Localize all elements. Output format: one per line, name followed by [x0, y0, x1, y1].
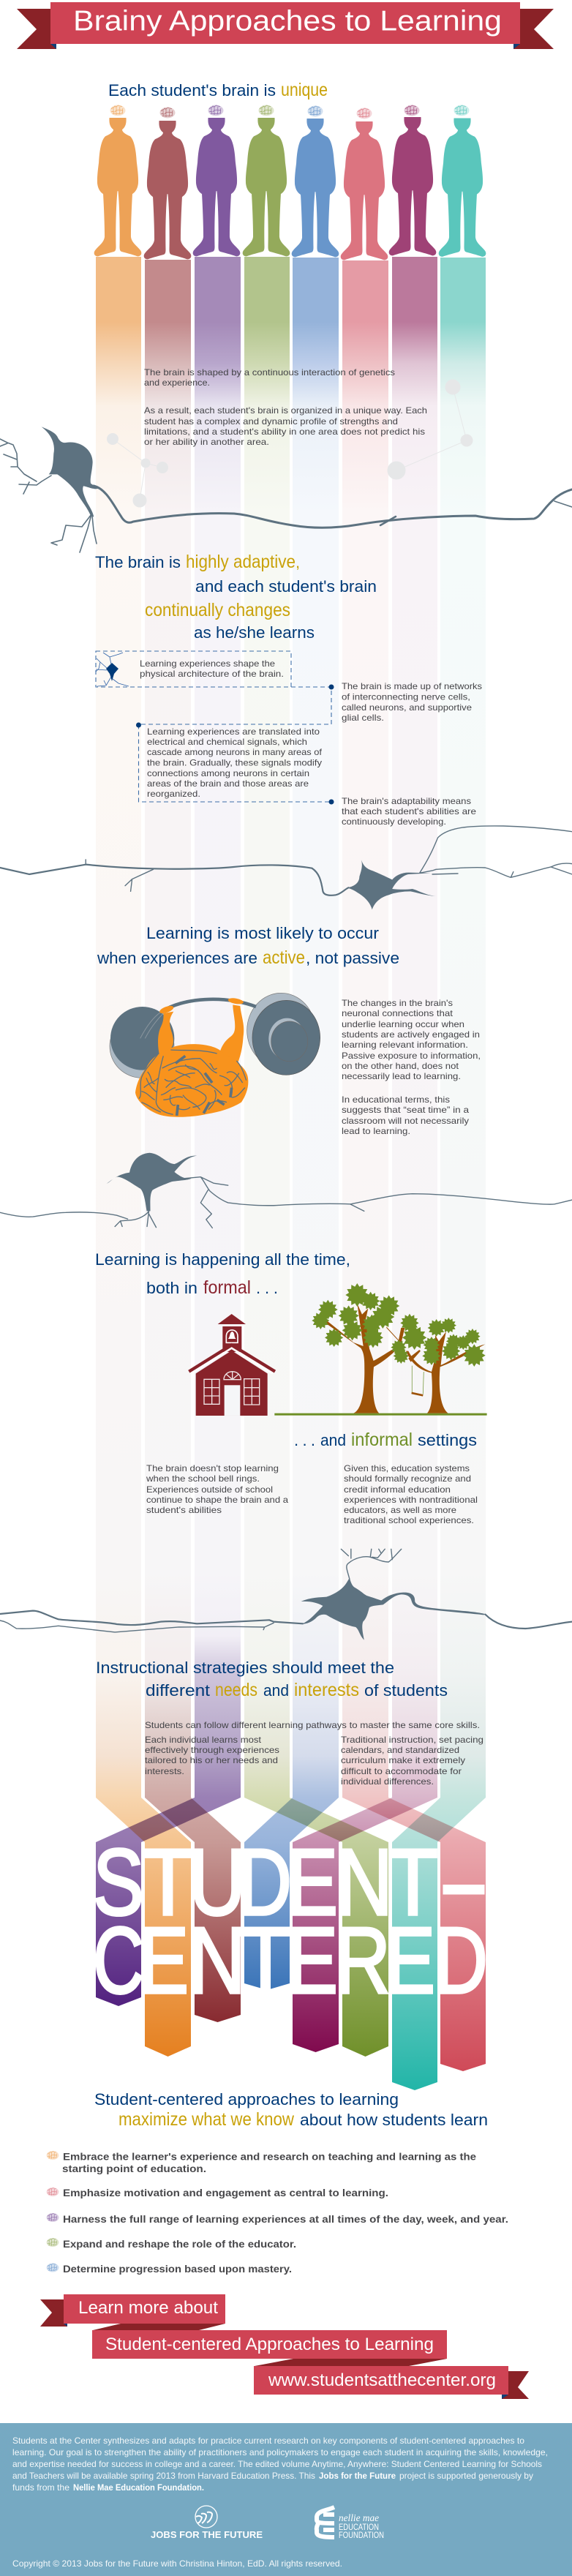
text: signals: reorganized.: [147, 789, 200, 799]
text: signals: [147, 726, 323, 799]
text: neuronal changes: students are actively engaged in: [342, 1029, 480, 1040]
heading: needs and interests: and: [263, 1681, 289, 1700]
footer text: learning. Our goal is to strengthen the ability of practitioners and policymakers to engage each student in acquiring the skills, knowledge,: [12, 2447, 548, 2457]
heading: highly adaptive: as he/she learns: [194, 623, 315, 642]
bullet list: Emphasize motivation and engagement as central to learning.: [63, 2187, 388, 2198]
text: learning pathways: difficult to accommodate for: [341, 1766, 462, 1776]
text: signals: electrical and chemical signals, which: [147, 737, 307, 747]
text: learning pathways: [145, 1720, 483, 1787]
footer text: funds from the: [12, 2482, 69, 2493]
heading: highly adaptive: and each student's brain: [195, 577, 377, 596]
text: education systems: Given this, education systems: [344, 1463, 470, 1473]
text: neuronal changes: learning relevant information.: [342, 1040, 468, 1050]
text: learning pathways: effectively through experiences: [145, 1745, 279, 1755]
text: brain shaped: limitations, and a student's ability in one area does not predict his: [144, 427, 425, 437]
text: neuronal changes: underlie learning occur when: [342, 1019, 464, 1029]
text: neuronal changes: suggests that “seat time” in a: [342, 1105, 469, 1115]
text: learning pathways: calendars, and standardized: [341, 1745, 459, 1755]
logo: Nellie Mae Education Foundation: FOUNDATION: [339, 2530, 384, 2540]
text: brain shaped: and experience.: [144, 378, 210, 388]
STUDENT-CENTERED white lettering: U: [189, 1830, 246, 1935]
footer text: and Teachers will be available spring 2013 from Harvard Education Press. This: [12, 2471, 315, 2481]
callout text: physical architecture of the brain.: [140, 669, 284, 679]
neuron 3: [0, 1153, 572, 1228]
footer text: [12, 2436, 548, 2493]
text: neuronal changes: [342, 998, 481, 1136]
learn more ribbon: Learn more about: [78, 2298, 218, 2318]
heading: informal: settings: [418, 1431, 477, 1449]
text: adaptability: that each student's abilities are: [342, 806, 476, 816]
heading: informal: informal: [351, 1430, 413, 1450]
STUDENT-CENTERED white lettering: E: [287, 1830, 338, 1935]
title banner: [17, 2, 554, 49]
text: neuronal changes: The changes in the brain's: [342, 998, 453, 1008]
heading: needs and interests: of students: [364, 1681, 448, 1700]
text: learning pathways: tailored to his or her needs and: [145, 1755, 278, 1765]
heading: informal: . . .: [294, 1431, 315, 1449]
heading: maximize: maximize what we know: [118, 2109, 295, 2130]
footer text: Nellie Mae Education Foundation.: [73, 2482, 204, 2493]
text: education systems: experiences with nontraditional: [344, 1495, 478, 1505]
text: neuronal changes: classroom will not necessarily: [342, 1116, 469, 1126]
STUDENT-CENTERED white lettering: E: [139, 1908, 189, 2013]
text: school bell: The brain doesn't stop learning: [146, 1463, 279, 1473]
logo: Nellie Mae Education Foundation: nellie mae: [339, 2513, 379, 2524]
heading: needs and interests: different: [146, 1681, 210, 1700]
text: learning pathways: curriculum make it extremely: [341, 1755, 465, 1765]
heading: each brain is unique: unique: [281, 80, 328, 100]
heading: needs and interests: interests: [294, 1680, 359, 1700]
text: neuronal changes: necessarily lead to learning.: [342, 1071, 461, 1081]
text: learning pathways: individual differences.: [341, 1776, 434, 1787]
neuron 2: [0, 826, 572, 909]
bullet list: Determine progression based upon mastery.: [63, 2263, 292, 2275]
STUDENT-CENTERED white lettering: N: [189, 1908, 246, 2013]
bullet list: Embrace the learner's experience and research on teaching and learning as the: [63, 2151, 476, 2163]
learn more ribbon: Student-centered Approaches to Learning: [105, 2335, 434, 2354]
bullet list: starting point of education.: [62, 2163, 206, 2174]
text: adaptability: [342, 796, 476, 827]
footer text: Jobs for the Future: [319, 2471, 396, 2481]
text: education systems: traditional school experiences.: [344, 1515, 474, 1525]
heading: active not passive: when experiences are: [97, 949, 257, 967]
text: neuronal changes: on the other hand, does not: [342, 1061, 459, 1071]
STUDENT-CENTERED white lettering: D: [238, 1830, 292, 1935]
neuron 1: [0, 427, 572, 552]
heading: formal: [95, 1250, 350, 1298]
text: signals: Learning experiences are translated into: [147, 726, 320, 737]
text: neuronal changes: In educational terms, this: [342, 1094, 450, 1105]
text: school bell: continue to shape the brain and a: [146, 1495, 288, 1505]
text: school bell: [146, 1463, 288, 1515]
heading: active not passive: , not passive: [306, 949, 399, 967]
STUDENT-CENTERED white lettering: C: [93, 1908, 144, 2013]
STUDENT-CENTERED white lettering: [93, 1830, 489, 2013]
logo: Nellie Mae Education Foundation: EDUCATION: [339, 2522, 379, 2532]
STUDENT-CENTERED white lettering: E: [287, 1908, 338, 2013]
STUDENT-CENTERED white lettering: E: [385, 1908, 435, 2013]
text: brain shaped: student has a complex and dynamic profile of strengths and: [144, 416, 398, 427]
icon: red schoolhouse: [189, 1314, 275, 1416]
copyright: Copyright © 2013 Jobs for the Future with Christina Hinton, EdD. All rights reserved.: [12, 2558, 342, 2569]
illustration: brain lifting barbell: [110, 993, 320, 1117]
learn more ribbon: www.studentsatthecenter.org: [268, 2370, 496, 2390]
illustration: trees and swing: [274, 1283, 487, 1416]
text: adaptability: continuously developing.: [342, 816, 446, 827]
STUDENT-CENTERED white lettering: R: [335, 1908, 391, 2013]
dashed callout box: [96, 651, 291, 687]
footer text: Students at the Center synthesizes and adapts for practice current research on key components of student-centered approaches to: [12, 2436, 524, 2446]
text: signals: cascade among neurons in many areas of: [147, 747, 323, 757]
text: signals: areas of the brain and those areas are: [147, 778, 309, 789]
learn more ribbon: [40, 2294, 529, 2399]
STUDENT-CENTERED white lettering: T: [142, 1830, 194, 1935]
text: neuronal changes: neuronal connections that: [342, 1008, 454, 1018]
STUDENT-CENTERED white lettering: D: [434, 1908, 488, 2013]
text: brain shaped: [144, 367, 427, 447]
callout text: [140, 658, 284, 679]
text: learning pathways: Students can follow different learning pathways to master the same core skills.: [145, 1720, 480, 1730]
small coloured brains above heads: [110, 105, 470, 119]
heading: maximize: about how students learn: [300, 2111, 488, 2129]
text: education systems: credit informal education: [344, 1484, 451, 1495]
STUDENT-CENTERED white lettering: T: [239, 1908, 292, 2013]
footer panel: [0, 2423, 572, 2576]
heading: highly adaptive: The brain is: [95, 553, 181, 571]
faint background network: [107, 380, 473, 507]
heading: formal: Learning is happening all the time,: [95, 1250, 350, 1269]
text: school bell: Experiences outside of school: [146, 1484, 273, 1495]
text: adaptability: The brain's adaptability means: [342, 796, 471, 806]
text: education systems: [344, 1463, 478, 1525]
heading: active not passive: active: [263, 947, 305, 968]
text: networks: [342, 681, 482, 723]
heading: needs and interests: Instructional strategies should meet the: [96, 1659, 394, 1677]
heading: formal: both in: [146, 1279, 197, 1297]
heading: highly adaptive: continually changes: [145, 600, 290, 620]
STUDENT-CENTERED white lettering: S: [93, 1830, 144, 1935]
heading: formal: formal: [203, 1277, 251, 1298]
eight student silhouettes: [94, 117, 486, 260]
text: learning pathways: Each individual learns most: [145, 1735, 262, 1745]
heading: active not passive: [97, 924, 399, 968]
text: brain shaped: As a result, each student's brain is organized in a unique way. Each: [144, 405, 427, 416]
text: networks: The brain is made up of networks: [342, 681, 482, 691]
bullet list: Expand and reshape the role of the educator.: [63, 2238, 296, 2250]
text: education systems: should formally recognize and: [344, 1473, 471, 1484]
logo: Nellie Mae Education Foundation: [317, 2507, 384, 2540]
text: learning pathways: Traditional instruction, set pacing: [341, 1735, 483, 1745]
heading: needs and interests: needs: [215, 1680, 257, 1700]
text: signals: connections among neurons in certain: [147, 768, 309, 778]
STUDENT-CENTERED white lettering: T: [388, 1830, 438, 1935]
heading: each brain is unique: Each student's brain is: [108, 81, 276, 99]
heading: highly adaptive: ,: [296, 553, 300, 571]
text: learning pathways: interests.: [145, 1766, 184, 1776]
crossing ribbons chart: [96, 1798, 486, 2090]
coloured student stripes: [96, 257, 486, 1798]
callout text: Learning experiences shape the: [140, 658, 275, 669]
heading: each brain is unique: [108, 80, 328, 100]
heading: maximize: Student-centered approaches to learning: [94, 2090, 399, 2109]
text: school bell: when the school bell rings.: [146, 1473, 260, 1484]
footer text: project is supported generously by: [399, 2471, 533, 2481]
logo: Jobs for the Future: JOBS FOR THE FUTURE: [151, 2529, 263, 2540]
bullet list: [47, 2151, 508, 2275]
STUDENT-CENTERED white lettering: -: [438, 1830, 489, 1935]
heading: needs and interests: [96, 1659, 448, 1700]
text: networks: of interconnecting nerve cells,: [342, 692, 470, 702]
text: networks: glial cells.: [342, 713, 384, 723]
heading: highly adaptive: [95, 552, 377, 642]
text: neuronal changes: Passive exposure to information,: [342, 1051, 481, 1061]
text: education systems: educators, as well as more: [344, 1505, 456, 1515]
footer text: and expertise needed for success in college and a career. The edited volume Anytime, Anywhere: Student Centered Learning for Schools: [12, 2459, 542, 2469]
logo: Jobs for the Future: [151, 2506, 263, 2540]
text: networks: called neurons, and supportive: [342, 702, 472, 713]
text: school bell: student's abilities: [146, 1505, 222, 1515]
STUDENT-CENTERED white lettering: N: [336, 1830, 393, 1935]
neuron 4: [0, 1549, 572, 1640]
heading: maximize: [94, 2090, 488, 2130]
heading: highly adaptive: highly adaptive: [186, 552, 296, 572]
text: brain shaped: The brain is shaped by a continuous interaction of genetics: [144, 367, 395, 378]
heading: formal: . . .: [256, 1279, 278, 1297]
title: Brainy Approaches to Learning: [73, 6, 502, 37]
dashed connectors with dots: [136, 685, 334, 805]
heading: active not passive: Learning is most likely to occur: [146, 924, 379, 942]
text: signals: the brain. Gradually, these signals modify: [147, 758, 322, 768]
text: brain shaped: or her ability in another area.: [144, 437, 269, 447]
text: neuronal changes: lead to learning.: [342, 1126, 410, 1136]
icon: small blue neuron: [96, 653, 129, 686]
heading: informal: [294, 1430, 477, 1450]
bullet list: Harness the full range of learning experiences at all times of the day, week, and year.: [63, 2213, 508, 2225]
heading: informal: and: [320, 1431, 346, 1449]
